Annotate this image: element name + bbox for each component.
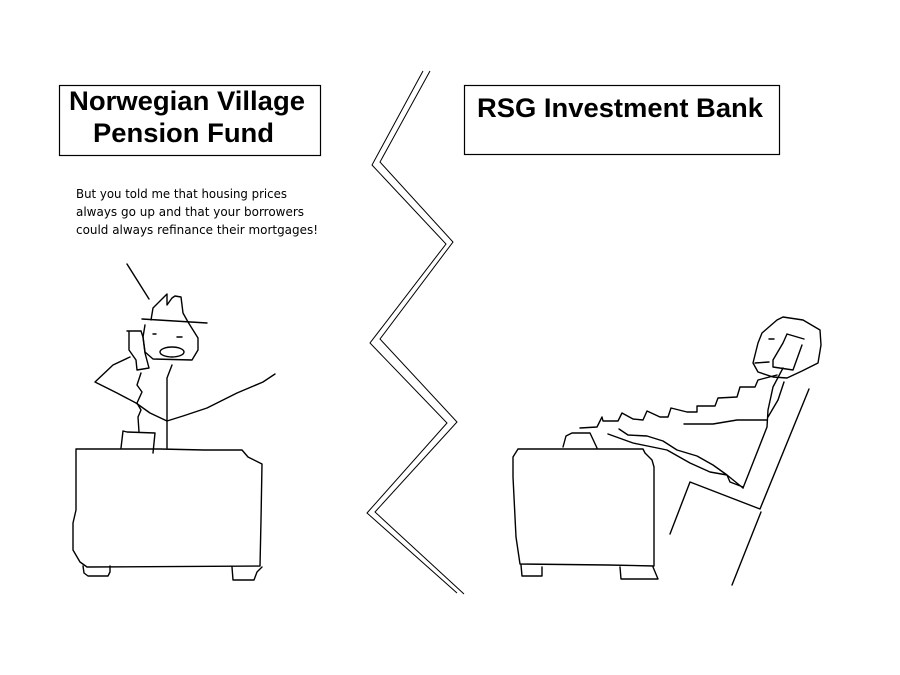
panel: RSG Investment Bank heading: RSG Investment Bank — [477, 93, 764, 123]
panel: Norwegian Village Pension Fund heading: Pension Fund — [93, 118, 274, 148]
figure: relaxed banker in reclining chair — [580, 317, 821, 585]
desk legs — [83, 566, 262, 580]
speech line — [127, 264, 149, 299]
arms and torso — [95, 357, 275, 421]
eyes — [153, 334, 182, 337]
jagged cord — [137, 373, 142, 432]
left desk — [73, 449, 262, 580]
speech text — [76, 187, 318, 237]
desk item — [121, 431, 155, 453]
eye and mouth — [755, 339, 774, 363]
speech text: But you told me that housing prices — [76, 187, 287, 201]
figure: shouting pension fund manager on the phone — [95, 294, 275, 453]
zigzag divider — [367, 71, 464, 594]
hat — [142, 294, 207, 323]
panel: Norwegian Village Pension Fund heading: Norwegian Village — [69, 86, 305, 116]
panel: Norwegian Village Pension Fund heading — [60, 86, 320, 156]
face — [143, 322, 198, 360]
desk item — [563, 433, 597, 448]
head — [753, 317, 821, 378]
legs — [608, 429, 743, 488]
right desk — [513, 433, 658, 579]
speech text: could always refinance their mortgages! — [76, 223, 318, 237]
body — [167, 365, 172, 448]
chair — [670, 389, 809, 585]
open mouth — [160, 347, 184, 357]
torso — [684, 368, 784, 488]
arm — [580, 375, 777, 428]
speech text: always go up and that your borrowers — [76, 205, 304, 219]
desk legs — [521, 565, 658, 579]
panel: RSG Investment Bank heading — [464, 86, 780, 154]
phone — [773, 334, 804, 370]
phone — [127, 331, 149, 370]
